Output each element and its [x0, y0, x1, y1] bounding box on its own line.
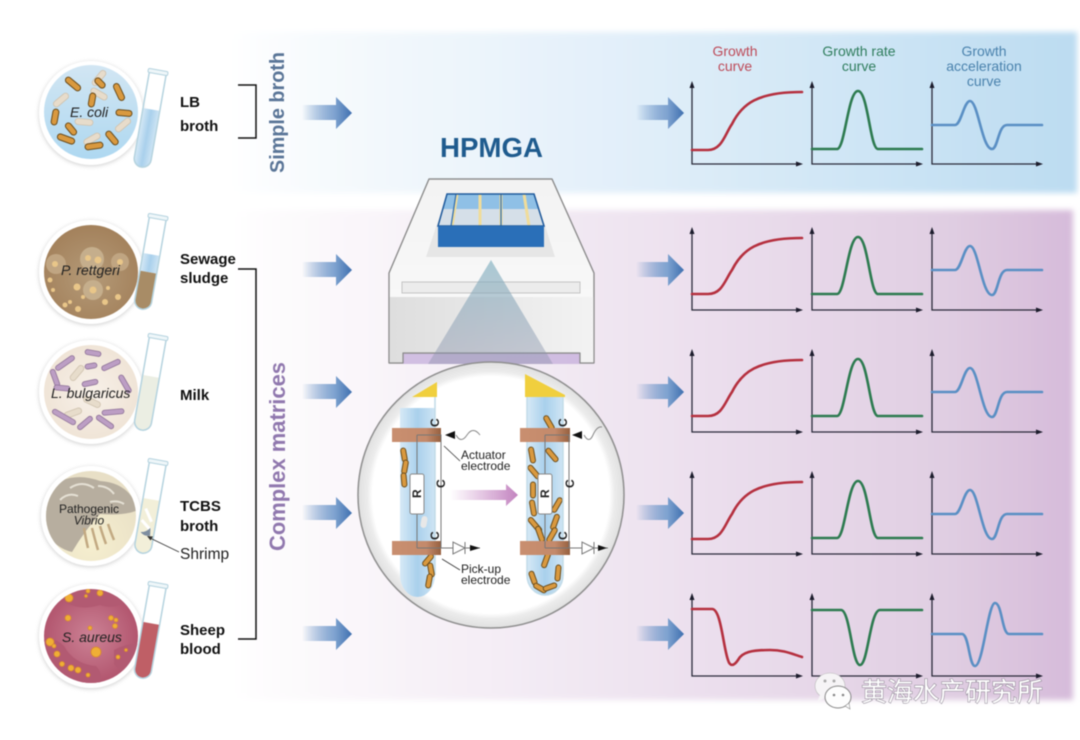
sample: pathogenic Vibrio dish and TCBS tube [41, 458, 168, 567]
chart: growth rate [810, 81, 923, 166]
column heading: growth curve: Growth [712, 43, 758, 59]
circuit: right electrodes: C [563, 479, 577, 488]
label: sewage sludge: Sewage [180, 251, 236, 268]
label: TCBS broth: broth [180, 518, 218, 535]
chart: growth acceleration [930, 81, 1043, 166]
panel: magnified sensor view [358, 362, 624, 628]
label: P. rettgeri: P. rettgeri [61, 262, 121, 278]
label: Pathogenic Vibrio: Pathogenic [59, 502, 119, 516]
panel: simple broth band [225, 32, 1077, 193]
label: sheep blood: blood [180, 641, 221, 658]
column heading: growth acceleration curve: curve [967, 73, 1001, 89]
sample: L. bulgaricus dish and milk tube [39, 333, 168, 445]
chart: growth acceleration [930, 349, 1043, 434]
circuit: right electrodes [520, 418, 608, 555]
test tube: LB broth [131, 68, 168, 169]
sample: E. coli dish and LB tube [39, 61, 168, 169]
circuit: right electrodes: C [556, 418, 570, 427]
chart: growth acceleration [930, 471, 1043, 556]
test tube: sheep blood [132, 581, 168, 680]
icon: HPMGA instrument [389, 179, 594, 364]
bracket: complex matrices [238, 269, 256, 639]
circuit: left electrodes: C [428, 531, 442, 540]
tube: many bacteria, right [525, 374, 565, 595]
test tube: sewage sludge [132, 213, 168, 311]
arrows: samples to HPMGA [302, 97, 352, 650]
label: actuator electrode [444, 446, 511, 473]
label: LB broth: broth [180, 118, 218, 135]
chart: growth curve [690, 227, 803, 312]
bracket: simple broth [238, 85, 256, 138]
label: L. bulgaricus: L. bulgaricus [51, 385, 130, 401]
test tube: milk [132, 333, 168, 432]
chart: growth acceleration [930, 227, 1043, 312]
label: LB broth: LB [180, 94, 200, 111]
chart: growth curve [690, 471, 803, 556]
chart row: milk [690, 349, 1043, 434]
tube: few bacteria, left [400, 382, 437, 597]
panel: complex matrices band [225, 210, 1073, 700]
chart: growth acceleration (inverted) [930, 593, 1043, 678]
arrow: growth over time [450, 484, 518, 506]
column heading: growth acceleration curve: acceleration [946, 58, 1022, 74]
label: shrimp with leader [147, 536, 229, 563]
label: pick-up electrode [442, 559, 511, 587]
watermark: WeChat icon [815, 673, 851, 709]
label: Pathogenic Vibrio: Vibrio [74, 514, 105, 528]
chart row: sheep blood [690, 593, 1043, 678]
column heading: growth acceleration curve: Growth [961, 43, 1007, 59]
label: pick-up electrode: electrode [461, 573, 511, 587]
icon: light beam [428, 260, 553, 364]
chart row: LB broth [690, 81, 1043, 166]
label: actuator electrode: electrode [461, 459, 511, 473]
label: sheep blood: Sheep [180, 622, 225, 639]
label: sewage sludge: sludge [180, 270, 228, 287]
label: pick-up electrode: Pick-up [461, 562, 501, 576]
column heading: growth curve: curve [718, 58, 752, 74]
chart: growth rate [810, 471, 923, 556]
chart: growth rate (inverted) [810, 593, 923, 678]
circuit: left electrodes [392, 418, 480, 555]
label: actuator electrode: Actuator [461, 448, 506, 462]
column heading: growth rate curve: Growth rate [822, 43, 896, 59]
icon: blue sample tray [438, 194, 544, 247]
chart: growth curve (inverted) [690, 593, 803, 678]
sample: S. aureus dish and blood tube [39, 581, 168, 690]
circuit: left electrodes: C [434, 479, 448, 488]
arrows: sensor to curves [636, 97, 684, 650]
chart: growth curve [690, 349, 803, 434]
circuit: left electrodes: C [428, 418, 442, 427]
test tube: TCBS broth with shrimp [132, 458, 168, 555]
chart: growth rate [810, 349, 923, 434]
chart: growth rate [810, 227, 923, 312]
chart row: TCBS broth [690, 471, 1043, 556]
label: E. coli: E. coli [70, 104, 109, 120]
column heading: growth rate curve: curve [842, 58, 876, 74]
chart row: sewage sludge [690, 227, 1043, 312]
circuit: right electrodes: C [556, 531, 570, 540]
heading: Simple broth: Simple broth [267, 52, 289, 173]
label: shrimp with leader: Shrimp [180, 546, 229, 563]
heading: Complex matrices: Complex matrices [265, 362, 290, 551]
circuit: right electrodes: R [538, 489, 552, 498]
heading: HPMGA: HPMGA [440, 132, 543, 163]
sample: P. rettgeri dish and sewage tube [39, 213, 168, 325]
label: milk: Milk [180, 387, 210, 404]
circuit: left electrodes: R [410, 489, 424, 498]
chart: growth curve [690, 81, 803, 166]
watermark: institute name: 黄海水产研究所 [861, 672, 1043, 709]
label: TCBS broth: TCBS [180, 498, 221, 515]
label: S. aureus: S. aureus [62, 629, 122, 645]
